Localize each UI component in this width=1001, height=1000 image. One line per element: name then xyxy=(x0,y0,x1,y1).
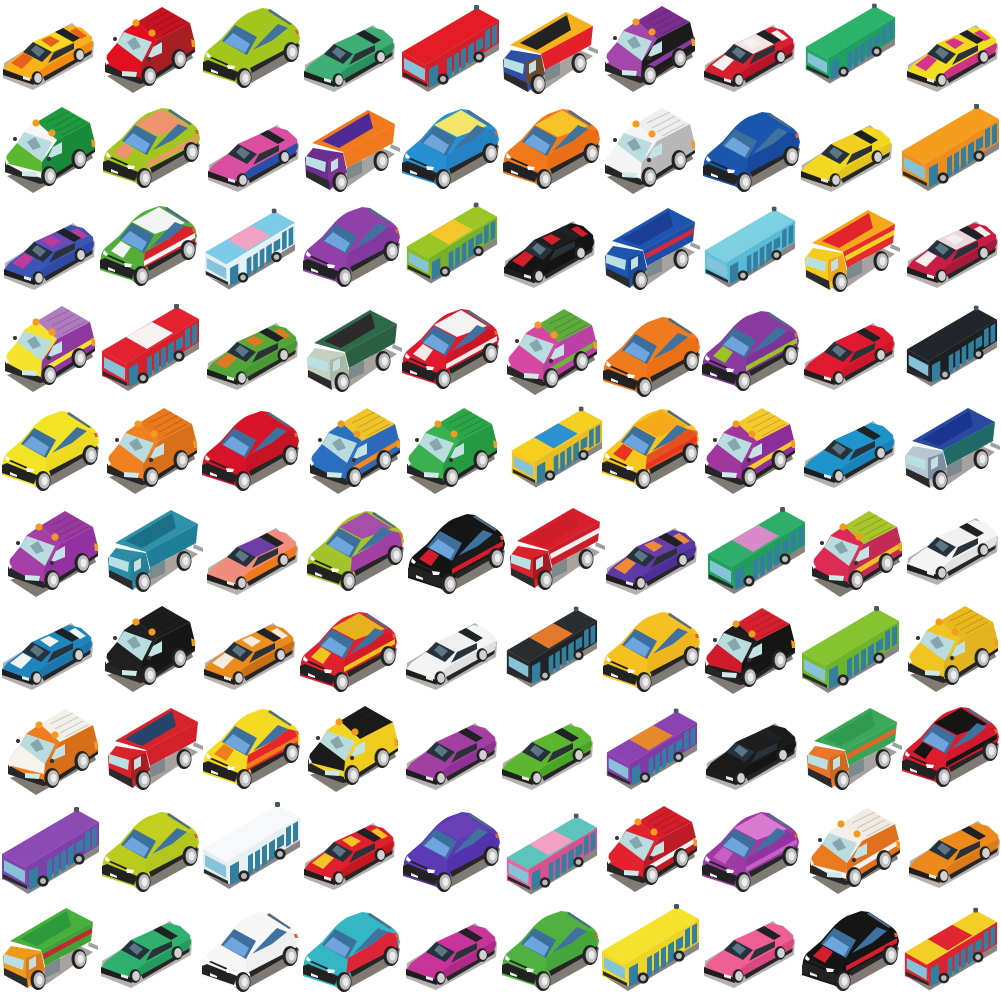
hatchback: lime yellow xyxy=(102,812,199,892)
car: yellow xyxy=(801,125,892,192)
car: green xyxy=(502,723,593,790)
hatchback: lime xyxy=(203,8,300,88)
row 8 vehicles xyxy=(8,706,999,795)
van: yellow purple xyxy=(5,306,95,392)
van: white green xyxy=(5,107,95,193)
car: red yellow xyxy=(304,823,395,890)
bus: white xyxy=(203,802,300,889)
van: purple yellow xyxy=(705,408,795,494)
bus: black orange xyxy=(507,607,597,688)
hatchback: navy xyxy=(703,112,800,192)
row 9 vehicles xyxy=(2,802,1000,895)
bus: yellow blue xyxy=(512,407,602,488)
car: white xyxy=(406,623,497,690)
row 2 vehicles xyxy=(5,104,999,194)
bus: pink teal xyxy=(507,814,597,895)
row 5 vehicles xyxy=(2,407,1000,494)
bus: purple orange xyxy=(607,709,697,790)
hatchback: yellow xyxy=(603,612,700,692)
truck: teal xyxy=(108,510,203,592)
van: black red xyxy=(705,608,795,694)
hatchback: violet pink xyxy=(702,812,799,892)
car: blue magenta xyxy=(4,223,95,290)
truck: red cargo blue cab xyxy=(503,12,598,94)
bus: orange xyxy=(902,104,999,191)
truck: blue xyxy=(605,208,700,290)
truck: red navy xyxy=(108,708,203,790)
truck: green orange xyxy=(807,708,902,790)
van: magenta green xyxy=(507,309,597,395)
bus: cyan xyxy=(705,207,795,288)
bus: lime yellow xyxy=(407,203,497,284)
car: orange white xyxy=(204,623,295,690)
row 6 vehicles xyxy=(8,507,998,597)
van: red white xyxy=(607,806,697,892)
bus: black xyxy=(907,306,997,387)
row 3 vehicles xyxy=(4,203,998,292)
van: blue orange yellow xyxy=(310,408,400,494)
bus: green xyxy=(806,4,895,84)
car: blue xyxy=(804,421,895,488)
van: purple black xyxy=(605,6,695,92)
hatchback: yellow xyxy=(2,411,99,491)
car: crimson white xyxy=(907,221,998,288)
van: red xyxy=(105,7,195,93)
car: red white stripes xyxy=(704,25,795,92)
bus: yellow xyxy=(602,904,699,991)
van: black xyxy=(105,606,195,692)
bus: purple xyxy=(2,807,99,894)
row 10 vehicles xyxy=(3,904,997,992)
hatchback: orange xyxy=(603,317,700,397)
van: green pink red xyxy=(812,511,902,597)
hatchback: black red xyxy=(802,911,899,991)
car: black red xyxy=(504,221,595,288)
car: white xyxy=(907,518,998,585)
car: green xyxy=(101,921,192,988)
van: orange white xyxy=(8,709,98,795)
hatchback: red white cross xyxy=(402,309,499,389)
hatchback: purple lime xyxy=(702,311,799,391)
van: yellow xyxy=(908,606,998,692)
car: yellow magenta xyxy=(907,25,998,92)
truck: green orange red xyxy=(3,908,98,990)
van: black yellow xyxy=(308,706,398,792)
hatchback: red yellow xyxy=(300,612,397,692)
bus: white blue pink xyxy=(205,209,295,290)
hatchback: yellow orange red xyxy=(203,709,300,789)
hatchback: red xyxy=(202,411,299,491)
truck: yellow red xyxy=(805,210,900,292)
hatchback: teal red xyxy=(303,912,400,992)
truck: red white xyxy=(510,508,605,590)
truck: navy green xyxy=(905,408,1000,490)
hatchback: purple lime xyxy=(307,511,404,591)
hatchback: purple blue xyxy=(403,812,500,892)
hatchback: blue yellow xyxy=(402,109,499,189)
hatchback: green xyxy=(502,911,599,991)
row 1 vehicles xyxy=(3,4,998,94)
van: orange white xyxy=(810,808,900,894)
truck: purple cargo orange xyxy=(305,110,400,192)
hatchback: purple xyxy=(303,207,400,287)
hatchback: black red xyxy=(408,514,505,594)
bus: red white xyxy=(102,304,199,391)
van: orange xyxy=(107,408,197,494)
car: magenta blue xyxy=(208,125,299,192)
hatchback: orange yellow xyxy=(503,109,600,189)
van: white grey xyxy=(605,108,695,194)
bus: red xyxy=(402,5,499,92)
bus: yellow red xyxy=(905,908,997,990)
bus: lime xyxy=(802,606,899,693)
car: orange xyxy=(909,821,1000,888)
row 7 vehicles xyxy=(2,606,998,694)
car: green orange xyxy=(207,323,298,390)
car: red xyxy=(804,323,895,390)
van: green xyxy=(407,408,497,494)
hatchback: green white red flag xyxy=(100,206,197,286)
truck: grey cab dark green cargo coal xyxy=(307,310,402,392)
car: blue white xyxy=(2,623,93,690)
row 4 vehicles xyxy=(5,304,997,397)
car: green xyxy=(304,25,395,92)
hatchback: lime salmon xyxy=(103,108,200,188)
hatchback: yellow red orange xyxy=(602,409,699,489)
car: pink xyxy=(704,921,795,988)
car: purple orange xyxy=(606,528,697,595)
car: purple xyxy=(406,723,497,790)
hatchback: white xyxy=(202,912,299,992)
van: purple xyxy=(8,511,98,597)
bus: green pink xyxy=(708,507,805,594)
car: orange yellow sports sedan xyxy=(3,23,94,90)
car: orange purple pink xyxy=(207,528,298,595)
car: black xyxy=(706,723,797,790)
car: magenta xyxy=(406,923,497,990)
hatchback: red black xyxy=(902,707,999,787)
